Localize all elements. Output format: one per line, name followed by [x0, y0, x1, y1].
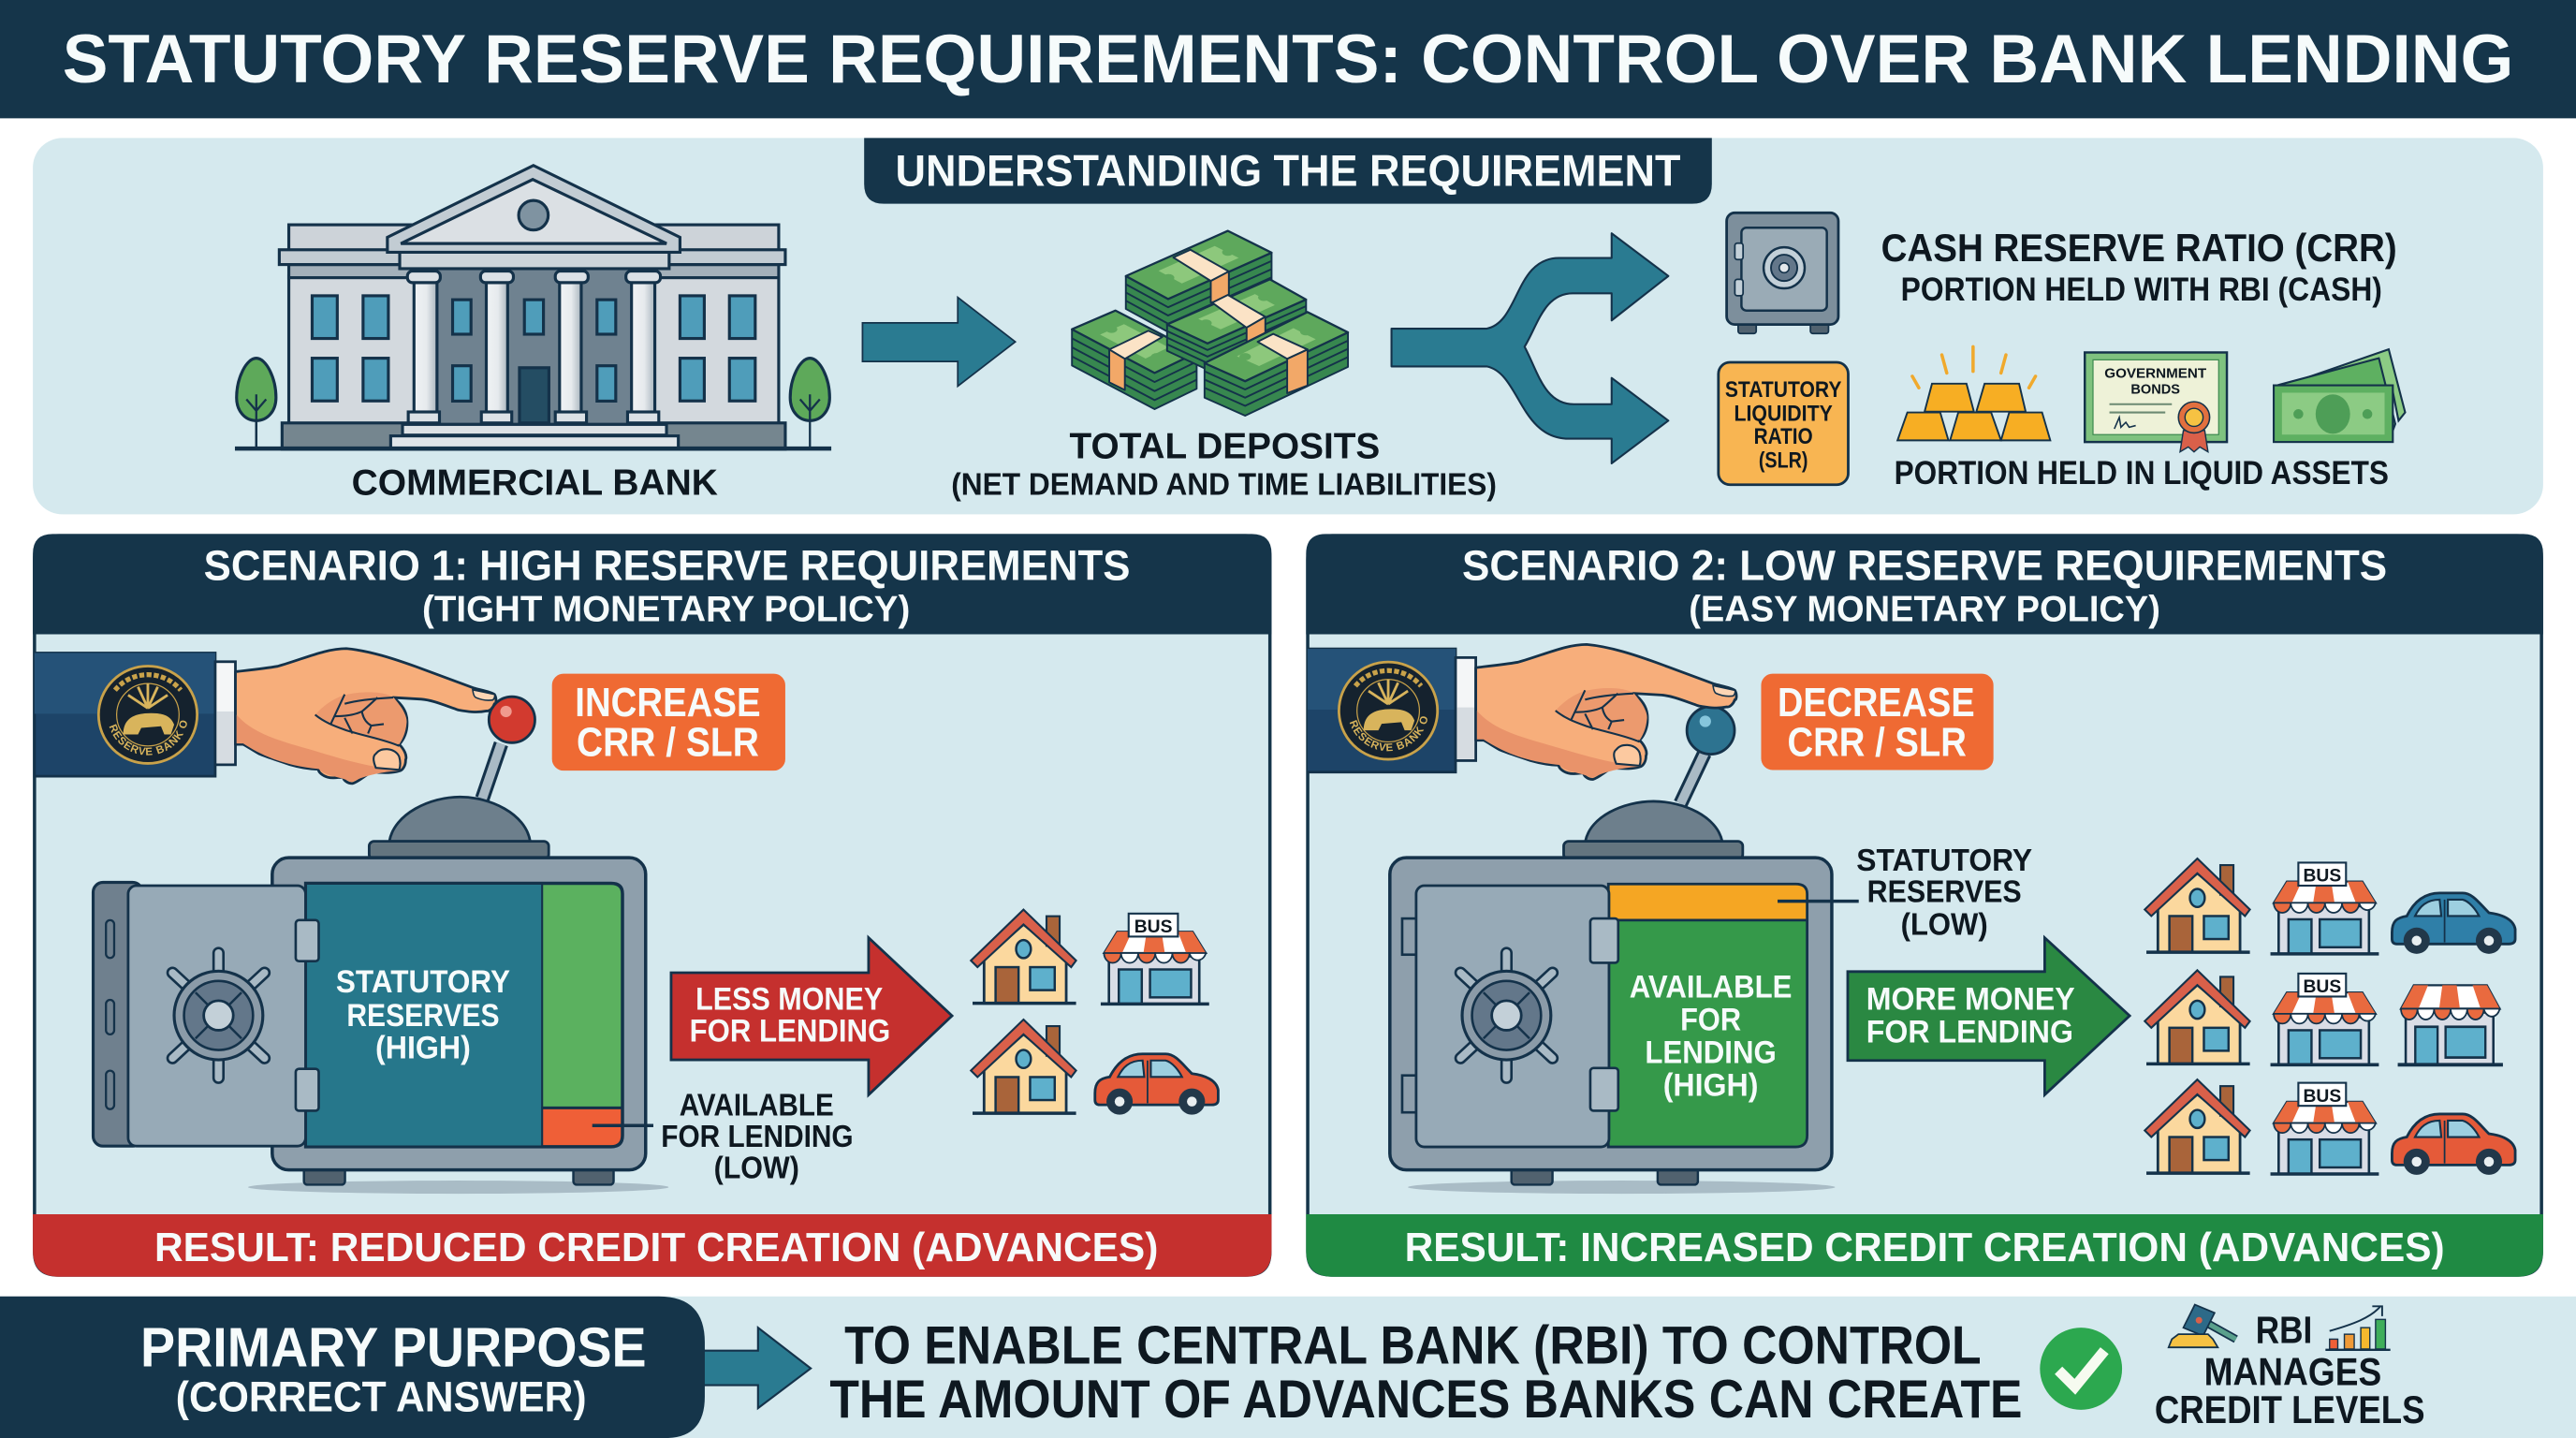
icon: gavel	[2169, 1305, 2236, 1347]
icon: vault with high lending	[1390, 858, 1859, 1194]
panel: scenario 2 low reserve requirements	[1306, 534, 2543, 1277]
label: available for lending high	[1630, 969, 1792, 1104]
icon: government bonds certificate	[2085, 352, 2227, 452]
heading: scenario 2	[1306, 534, 2543, 634]
panel: primary purpose strip	[0, 1297, 2576, 1438]
title bar	[0, 0, 2576, 118]
icon: hand pulling lever	[0, 0, 496, 784]
icons: limited borrowers: BUS	[1134, 917, 1173, 937]
panel: scenario 1 high reserve requirements	[0, 0, 1271, 1277]
vault: statutory reserves sliver	[1608, 884, 1808, 1147]
label: available for lending low: FOR LENDING	[661, 1120, 854, 1154]
icon: open vault with high reserves	[94, 858, 668, 1194]
text: RBI manages credit levels: RBI	[2256, 1308, 2312, 1351]
label: available for lending high: LENDING	[1645, 1035, 1777, 1071]
label: available for lending high: AVAILABLE	[1630, 969, 1792, 1005]
arrow: less money for lending: LESS MONEY	[695, 981, 883, 1017]
icon: CRR safe	[1727, 213, 1838, 333]
icon: lever machine	[1564, 707, 1743, 859]
arrow: purpose to statement	[698, 1328, 811, 1408]
heading: scenario 1: (TIGHT MONETARY POLICY)	[422, 589, 910, 629]
icons: many borrowers: BUS	[2303, 867, 2341, 887]
box: statutory liquidity ratio: RATIO	[1754, 425, 1813, 449]
arrow: less money for lending	[671, 938, 952, 1094]
label: available for lending low	[661, 1089, 854, 1185]
arrow: less money for lending: FOR LENDING	[690, 1014, 890, 1049]
arrow: bank to deposits	[862, 298, 1016, 386]
arrow: more money for lending	[1848, 938, 2130, 1094]
label: statutory reserves low: (LOW)	[1901, 908, 1988, 943]
icon: rising bar chart	[2325, 1306, 2391, 1350]
arrow: more money for lending: MORE MONEY	[1866, 981, 2075, 1017]
icon: gold bars	[1897, 346, 2050, 440]
label: total deposits: TOTAL DEPOSITS	[1070, 427, 1380, 467]
badge: increase CRR / SLR: INCREASE	[575, 680, 761, 726]
label: statutory reserves high	[336, 964, 510, 1065]
heading: primary purpose	[0, 1297, 705, 1438]
label: statutory reserves high: (HIGH)	[375, 1030, 471, 1065]
label: statutory reserves high: RESERVES	[346, 998, 500, 1034]
icon: stacks of money	[1072, 231, 1348, 416]
icon: lever machine	[369, 697, 549, 859]
badge: decrease CRR / SLR: DECREASE	[1778, 680, 1975, 726]
badge: decrease CRR / SLR: CRR / SLR	[1788, 719, 1967, 765]
text: primary purpose statement	[829, 1316, 2023, 1430]
icons: many borrowers: BUS	[2303, 977, 2341, 997]
heading: scenario 1: SCENARIO 1: HIGH RESERVE REQUIREMENTS	[204, 542, 1131, 590]
heading: scenario 2: SCENARIO 2: LOW RESERVE REQUIREMENTS	[1462, 542, 2387, 590]
money bundle: back	[1126, 231, 1271, 332]
label: available for lending low: (LOW)	[714, 1151, 799, 1185]
footer: increased credit creation	[1306, 1214, 2543, 1277]
footer: reduced credit creation: RESULT: REDUCED CREDIT CREATION (ADVANCES)	[154, 1225, 1158, 1270]
label: commercial bank: COMMERCIAL BANK	[352, 462, 718, 503]
icons: many borrowers: BUS	[2303, 1087, 2341, 1107]
vault: lending sliver	[542, 884, 622, 1146]
arrow: split into CRR and SLR	[1392, 233, 1668, 463]
money bundle: middle	[1167, 279, 1306, 370]
label: cash reserve ratio: PORTION HELD WITH RBI (CASH)	[1901, 271, 2382, 308]
panel: understanding the requirement	[33, 138, 2543, 514]
label: statutory reserves high: STATUTORY	[336, 964, 510, 1000]
text: primary purpose statement: TO ENABLE CENTRAL BANK (RBI) TO CONTROL	[844, 1316, 1982, 1376]
label: available for lending low: AVAILABLE	[680, 1089, 834, 1123]
icons: many borrowers	[2144, 858, 2515, 1175]
text: RBI manages credit levels: MANAGES	[2204, 1350, 2381, 1394]
icon: government bonds certificate: BONDS	[2130, 382, 2180, 397]
label: portion held in liquid assets: PORTION HELD IN LIQUID ASSETS	[1895, 455, 2389, 492]
heading: scenario 1	[33, 534, 1271, 634]
label: cash reserve ratio	[1881, 226, 2397, 308]
box: statutory liquidity ratio: LIQUIDITY	[1734, 402, 1833, 426]
label: statutory reserves low: STATUTORY	[1856, 844, 2032, 878]
heading: scenario 2: (EASY MONETARY POLICY)	[1689, 589, 2160, 629]
box: statutory liquidity ratio	[1719, 362, 1848, 485]
heading: primary purpose: (CORRECT ANSWER)	[176, 1373, 587, 1421]
text: RBI manages credit levels: CREDIT LEVELS	[2155, 1387, 2425, 1431]
icons: limited borrowers	[971, 910, 1218, 1115]
badge: increase CRR / SLR	[552, 674, 785, 770]
label: available for lending high: FOR	[1680, 1002, 1741, 1037]
label: statutory reserves low	[1856, 844, 2032, 943]
heading: understanding the requirement: UNDERSTANDING THE REQUIREMENT	[896, 146, 1681, 196]
icon: check mark	[2040, 1328, 2122, 1410]
money bundle: left	[1072, 311, 1196, 409]
footer: reduced credit creation	[33, 1214, 1271, 1277]
arrow: more money for lending: FOR LENDING	[1866, 1014, 2073, 1049]
text: RBI manages credit levels	[2155, 1308, 2425, 1431]
heading: primary purpose: PRIMARY PURPOSE	[140, 1315, 647, 1378]
icon: government bonds certificate: GOVERNMENT	[2104, 367, 2206, 382]
icon: banknotes	[2274, 349, 2405, 442]
label: available for lending high: (HIGH)	[1663, 1068, 1758, 1104]
title bar: STATUTORY RESERVE REQUIREMENTS: CONTROL OVER BANK LENDING	[63, 20, 2513, 97]
label: cash reserve ratio: CASH RESERVE RATIO (CRR)	[1881, 226, 2397, 270]
label: statutory reserves low: RESERVES	[1867, 875, 2022, 910]
footer: increased credit creation: RESULT: INCREASED CREDIT CREATION (ADVANCES)	[1405, 1225, 2445, 1270]
badge: increase CRR / SLR: CRR / SLR	[577, 719, 759, 765]
icon: commercial bank building	[235, 166, 831, 449]
text: primary purpose statement: THE AMOUNT OF ADVANCES BANKS CAN CREATE	[829, 1370, 2023, 1430]
badge: decrease CRR / SLR	[1761, 674, 1994, 770]
icon: hand on lever	[1308, 643, 1737, 781]
money bundle: right	[1205, 312, 1348, 416]
box: statutory liquidity ratio: STATUTORY	[1725, 378, 1842, 403]
label: total deposits: (NET DEMAND AND TIME LIABILITIES)	[951, 467, 1497, 502]
label: total deposits	[951, 427, 1497, 502]
box: statutory liquidity ratio: (SLR)	[1759, 448, 1808, 473]
